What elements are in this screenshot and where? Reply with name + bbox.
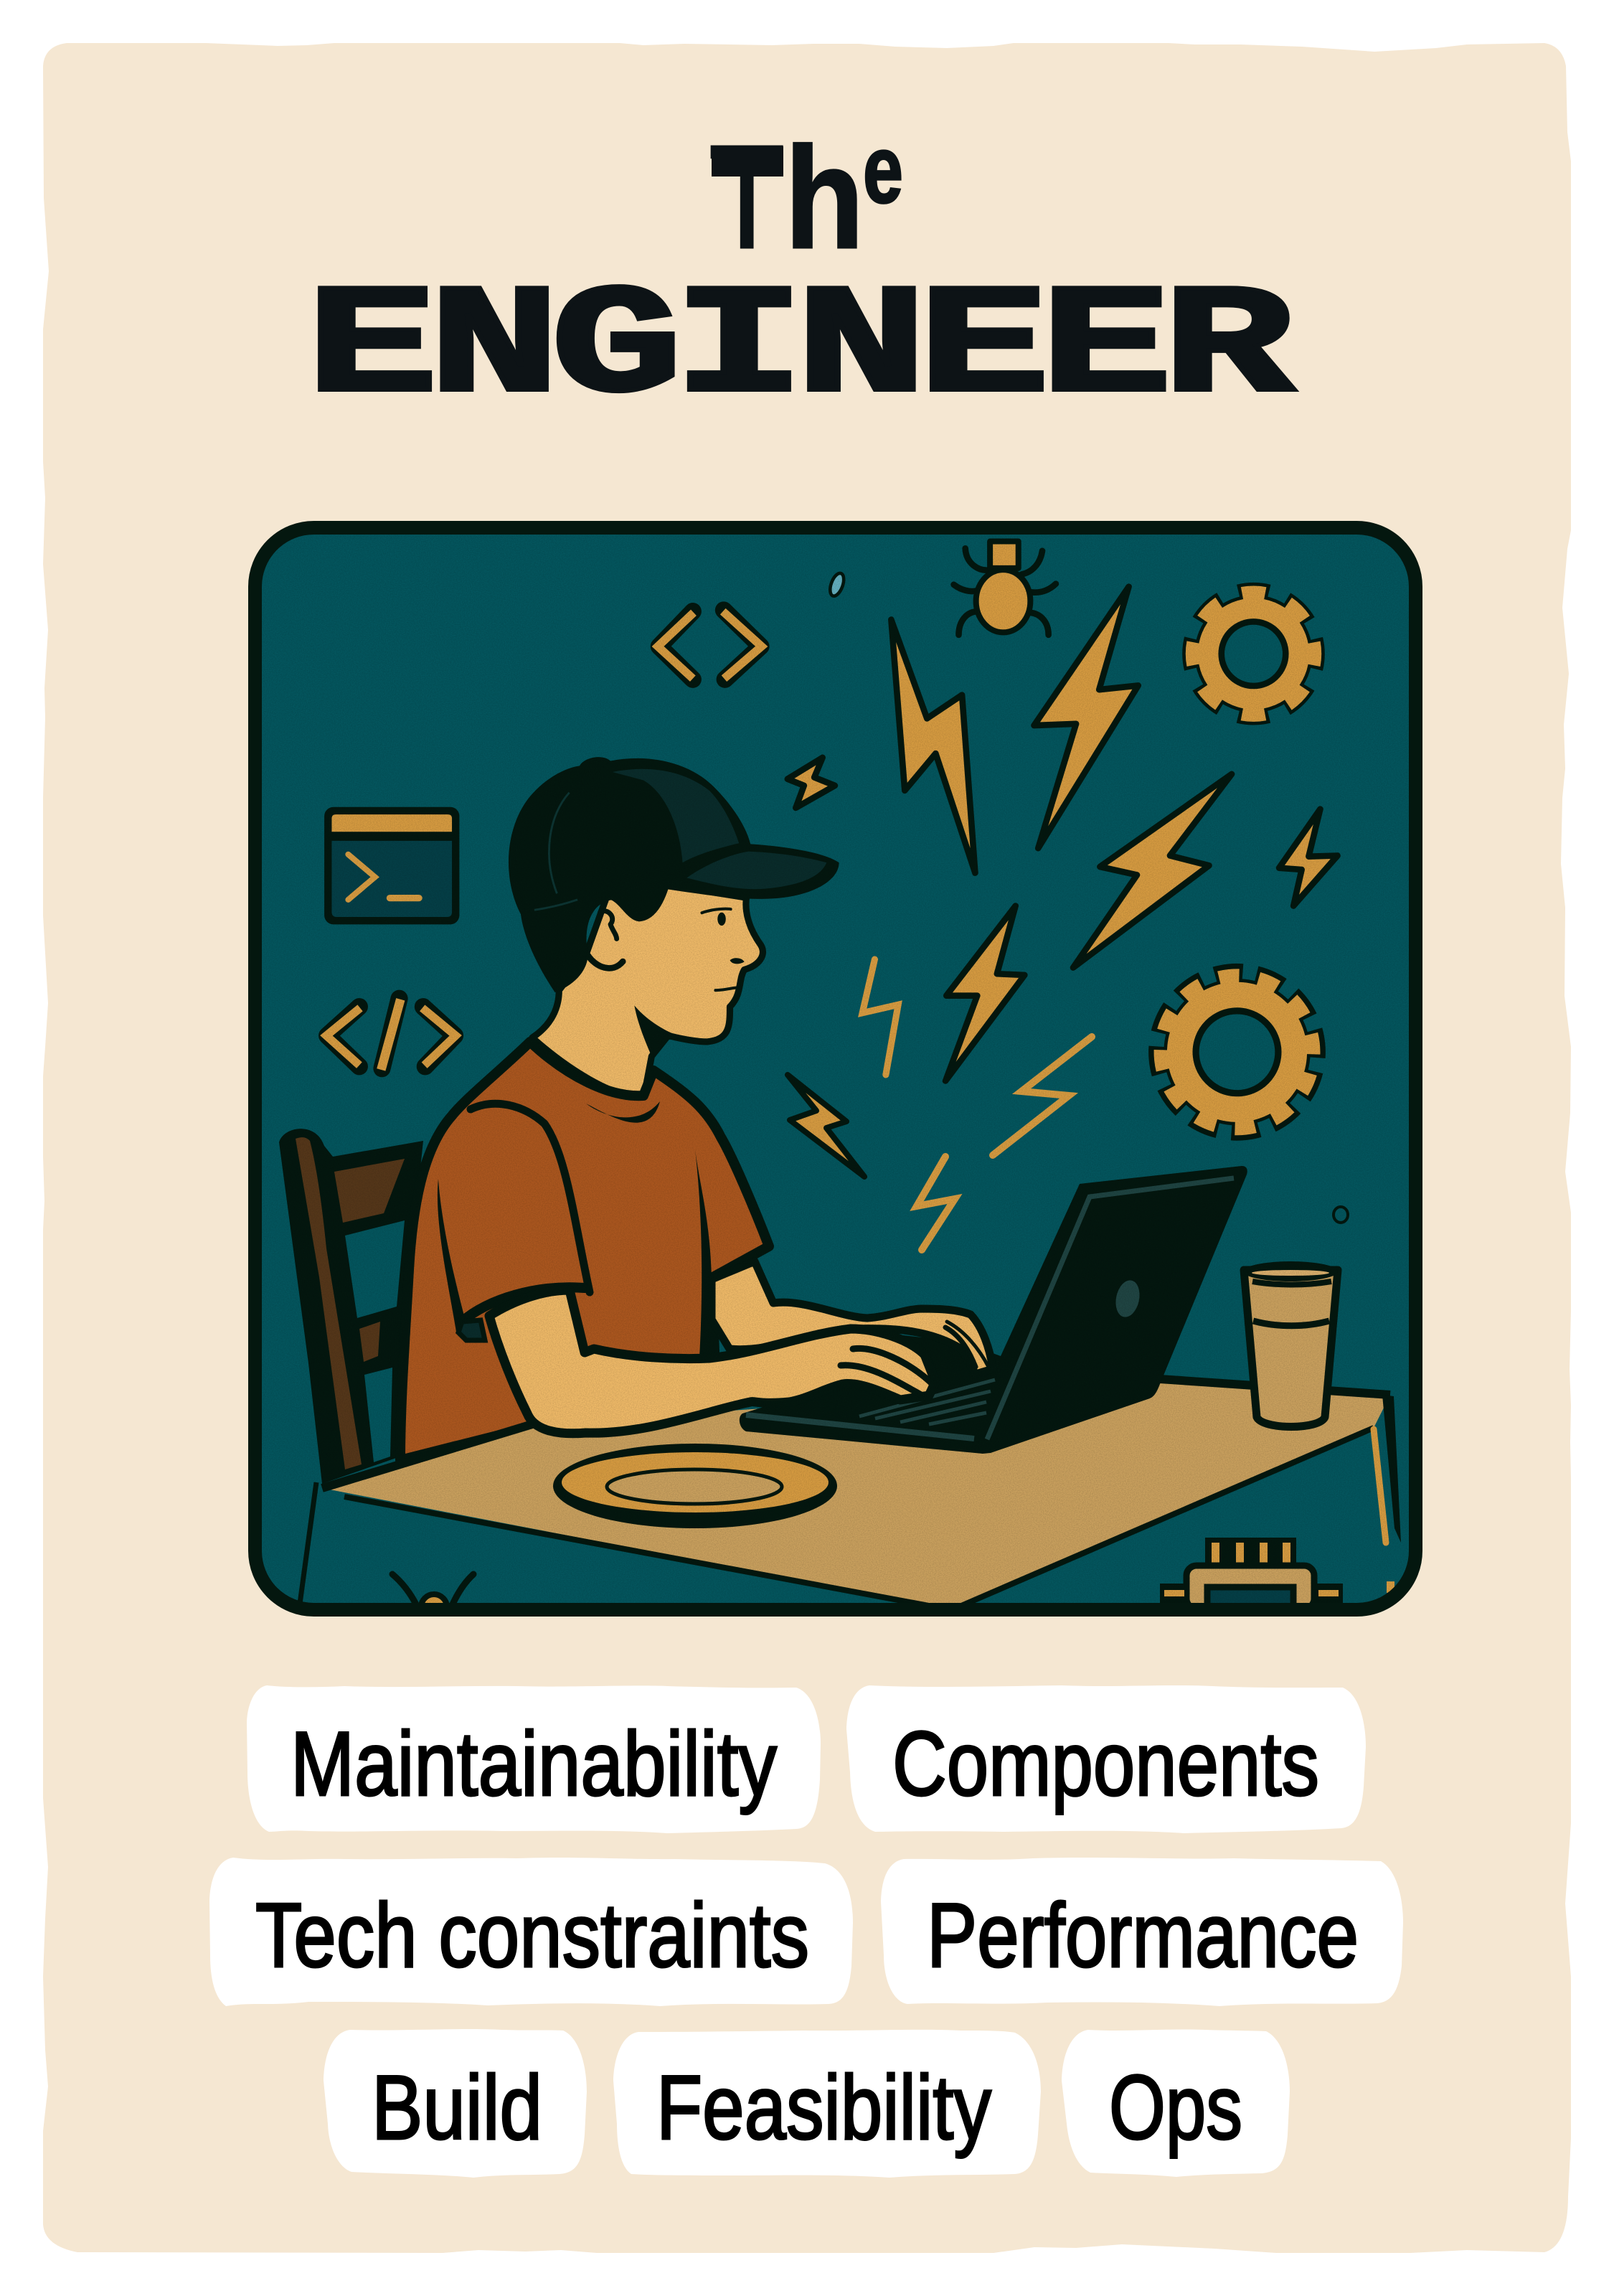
jaw shadow [634, 1005, 684, 1058]
icon: large gear [1154, 969, 1320, 1135]
icon: bug at bottom [392, 1574, 473, 1620]
sleeve cuff shadow [458, 1320, 485, 1340]
panel: illustration [248, 521, 1422, 1620]
icon: water drop [829, 571, 845, 598]
cap seams [534, 793, 577, 910]
tag: Build: Build [372, 2056, 542, 2158]
small ring speck [1334, 1207, 1348, 1223]
title word: The: T [709, 116, 785, 279]
sleeve seam [471, 1104, 590, 1292]
mouth [715, 987, 740, 990]
person: near arm and hand [489, 1290, 988, 1434]
tag: Ops: Ops [1109, 2056, 1242, 2158]
collar fold [586, 1101, 660, 1123]
title word: The: h [785, 117, 864, 278]
panel border [255, 528, 1416, 1610]
icon: small gear [1194, 594, 1313, 713]
lightning bolt lower left [788, 1075, 864, 1177]
cap panel [613, 769, 739, 862]
icon: closing tag brackets [326, 999, 456, 1070]
title [306, 116, 1296, 436]
icon: bug [954, 542, 1056, 635]
tag: Tech constraints: Tech constraints [255, 1884, 809, 1986]
title word: The [709, 116, 903, 279]
person: head with cap [509, 757, 839, 1099]
tag: Build [324, 2029, 587, 2178]
paper grain [248, 521, 1422, 1617]
hair and cap silhouette [509, 757, 839, 992]
table [300, 1379, 1401, 1607]
tag: Components: Components [892, 1713, 1319, 1815]
eyebrow and eye [702, 909, 731, 926]
tags [209, 1685, 1403, 2178]
tag: Performance: Performance [927, 1884, 1359, 1986]
lightning bolts [862, 587, 1338, 1081]
nostril [730, 958, 745, 964]
sleeve fold [438, 1179, 466, 1332]
tag: Maintainability [247, 1685, 821, 1833]
glass [1243, 1261, 1338, 1426]
plate [553, 1444, 837, 1528]
icon: code brackets top [658, 610, 762, 679]
icon: circuit chip [1160, 1538, 1394, 1609]
body fold [695, 1149, 712, 1358]
title word: The: e [863, 116, 903, 223]
small lightning bolt near cap [788, 758, 835, 808]
title word: ENGINEER: ENGINEER [306, 262, 1296, 436]
tag: Ops [1062, 2030, 1290, 2177]
person: far arm [712, 1261, 993, 1374]
cap brim [686, 852, 826, 889]
laptop [740, 1166, 1247, 1454]
tag: Performance [881, 1858, 1403, 2006]
chair [279, 1129, 423, 1484]
tag: Tech constraints [209, 1858, 853, 2006]
sleeve hem [462, 1287, 585, 1322]
tag: Feasibility: Feasibility [656, 2056, 991, 2158]
icon: terminal window [324, 807, 459, 924]
tag: Maintainability: Maintainability [291, 1713, 777, 1815]
face and neck [532, 885, 763, 1099]
ear detail [600, 911, 617, 938]
person: shirt [400, 1042, 769, 1460]
thin lightning bolts [917, 1037, 1092, 1250]
tag: Feasibility [613, 2030, 1041, 2178]
tag: Components [846, 1685, 1366, 1833]
ear [587, 955, 623, 968]
